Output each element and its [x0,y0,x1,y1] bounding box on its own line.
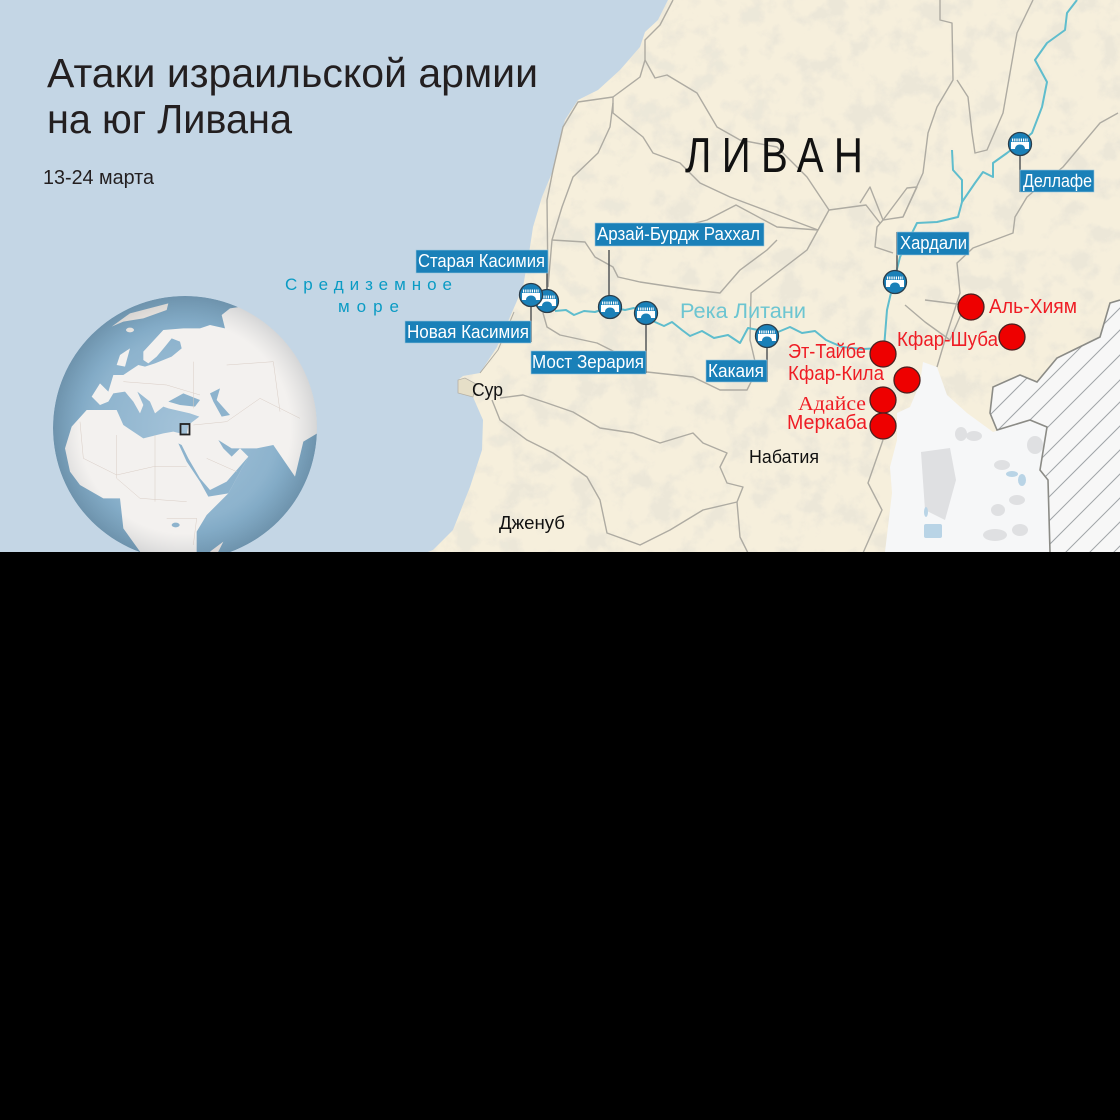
attack marker: Меркаба: Меркаба [787,412,868,434]
attack marker: Адайсе [798,387,896,415]
map: hatched Golan area [989,299,1120,552]
bridge label: Новая Касимия: Новая Касимия [407,322,529,342]
attack marker: Аль-Хиям: Аль-Хиям [989,296,1077,318]
attack marker: Кфар-Кила: Кфар-Кила [788,363,885,385]
icon: bridge Хардали [884,270,906,294]
attack marker: Адайсе: Адайсе [798,393,866,415]
attack marker: Аль-Хиям [958,294,1077,320]
globe inset [53,296,327,562]
sea label: Mediterranean: море [338,297,399,316]
attack marker: Кфар-Шуба [897,324,1025,351]
locator square [180,424,190,434]
icon: bridge Новая Касимия [520,284,542,306]
black lower area [0,552,1120,1120]
map: land of Lebanon [420,0,1120,552]
bridge label: Хардали: Хардали [900,233,967,253]
city labels: Сур [472,380,503,400]
title: на юг Ливана [47,96,292,142]
city labels: Набатия [749,447,819,467]
bridge label: Старая Касимия: Старая Касимия [418,251,545,271]
attack marker: Эт-Тайбе [788,341,896,367]
bridge label: Деллафе [1020,150,1094,192]
bridge label: Хардали [897,232,969,275]
icon: bridge Старая Касимия east [536,290,558,312]
date: 13-24 марта [43,167,155,189]
map: Litani river [555,0,1077,349]
attack marker: Меркаба [787,412,896,439]
city labels: Дженуб [499,513,565,533]
map: Israel territory [885,362,1120,552]
title: Атаки израильской армии [47,50,538,96]
attack marker: Кфар-Кила [788,363,920,393]
map: road and border network [480,0,1118,553]
bridge label: Какаия [706,340,767,382]
bridge label: Новая Касимия [405,300,531,343]
icon: bridge Арзай-Бурдж Раххал [598,296,622,318]
bridge label: Какаия: Какаия [708,361,764,381]
bridge label: Арзай-Бурдж Раххал [595,223,764,298]
bridge label: Мост Зерария [531,320,646,374]
river label: Litani: Река Литани [680,300,806,323]
sea label: Mediterranean: Средиземное [285,275,452,294]
icon: bridge Деллафе [1008,132,1032,156]
bridge label: Старая Касимия [416,250,548,295]
icon: bridge Зерария [634,302,658,324]
title [47,50,538,142]
country label: Lebanon: ЛИВАН [685,128,863,183]
bridge label: Арзай-Бурдж Раххал: Арзай-Бурдж Раххал [597,224,760,244]
icon: bridge Какаия [756,324,778,348]
attack marker: Эт-Тайбе: Эт-Тайбе [788,341,866,363]
city labels [472,380,819,533]
sea background [0,0,1120,552]
bridge label: Деллафе: Деллафе [1023,171,1092,191]
bridge label: Мост Зерария: Мост Зерария [532,352,644,372]
sea label: Mediterranean [285,275,452,316]
attack marker: Кфар-Шуба: Кфар-Шуба [897,329,999,351]
